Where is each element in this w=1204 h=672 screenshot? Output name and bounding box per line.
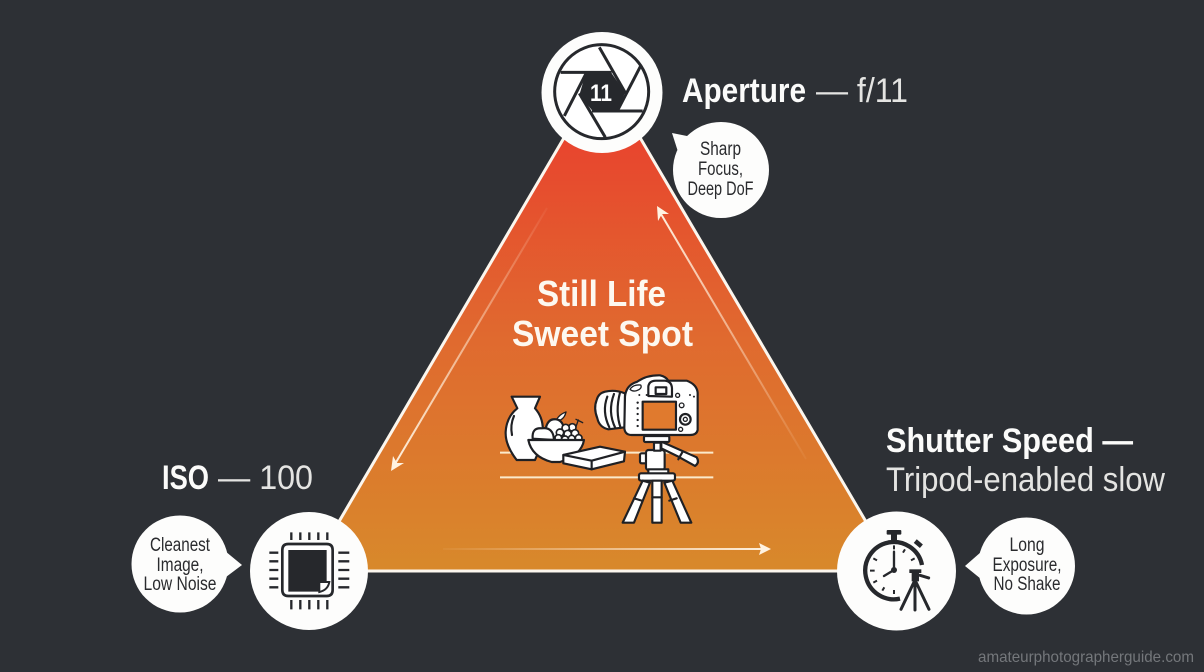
callout: long exposure: Long — [1010, 535, 1044, 556]
aperture value: 11 — [590, 80, 612, 107]
callout: sharp focus: Sharp — [700, 139, 741, 160]
arrow: aperture to ISO — [391, 208, 547, 471]
heading: still life sweet spot — [512, 273, 693, 354]
icon: sensor chip — [269, 532, 349, 609]
heading: still life sweet spot: Still Life — [537, 273, 666, 314]
callout: long exposure: No Shake — [994, 574, 1060, 595]
label: ISO — [162, 459, 313, 497]
callout: cleanest image: Low Noise — [144, 574, 216, 595]
callout: sharp focus: Deep DoF — [688, 179, 754, 200]
watermark: amateurphotographerguide.com — [978, 649, 1194, 666]
label: aperture: — f/11 — [816, 72, 908, 110]
icon: stopwatch and tripod — [865, 530, 929, 610]
exposure triangle — [310, 73, 895, 571]
aperture node — [542, 32, 662, 153]
icon: aperture blades — [555, 45, 649, 139]
icon: shutter circle — [837, 512, 956, 630]
arrow: ISO to shutter speed — [443, 543, 771, 555]
callout: long exposure — [965, 518, 1075, 614]
label: aperture — [682, 72, 908, 110]
arrow: shutter speed to aperture — [657, 206, 806, 459]
icon: ISO circle — [250, 512, 368, 630]
callout: cleanest image: Image, — [156, 555, 204, 576]
label: shutter speed — [886, 422, 1165, 499]
label: aperture: Aperture — [682, 72, 806, 110]
icon: still life and camera on tripod — [500, 375, 713, 523]
callout: cleanest image — [132, 516, 242, 612]
label: shutter speed: Tripod-enabled slow — [886, 461, 1165, 499]
icon: aperture circle — [542, 32, 662, 153]
heading: still life sweet spot: Sweet Spot — [512, 313, 693, 354]
callout: sharp focus: Focus, — [698, 159, 743, 180]
callout: cleanest image: Cleanest — [150, 535, 211, 556]
label: ISO: — 100 — [218, 459, 313, 497]
label: shutter speed: Shutter Speed — — [886, 422, 1133, 460]
callout: sharp focus — [672, 122, 769, 218]
callout: long exposure: Exposure, — [992, 555, 1062, 576]
ISO node — [250, 512, 368, 630]
label: ISO: ISO — [162, 459, 209, 497]
shutter speed node — [837, 512, 956, 630]
